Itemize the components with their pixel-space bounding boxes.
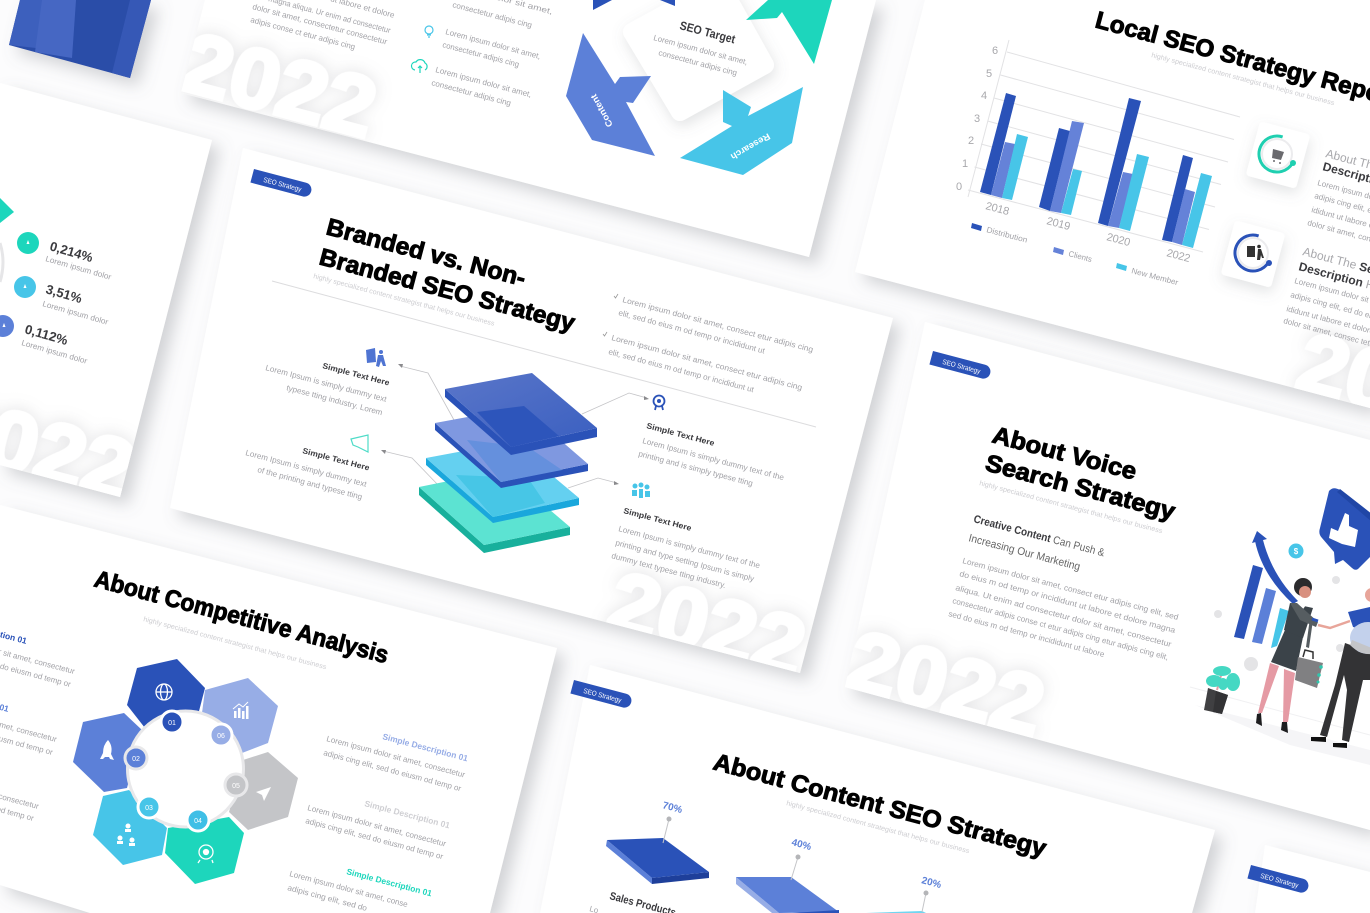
stat: 3,51%: Lorem ipsum dolor	[41, 299, 110, 327]
icon: building and person	[366, 348, 386, 367]
item: bottom left: of the printing and typese tting	[256, 465, 363, 502]
item: top right	[637, 396, 785, 488]
slide: bottom right	[1247, 845, 1370, 913]
icon: team	[632, 482, 650, 498]
stat: 3,51%: 3,51%	[44, 281, 84, 306]
subtitle: highly specialized content strategist that helps our business	[1150, 52, 1335, 107]
slide: about voice search strategy	[838, 322, 1370, 830]
background dots	[1214, 576, 1344, 671]
description 3: Lorem ipsum dolor sit amet, conse	[288, 869, 409, 909]
centre card SEO target: SEO Target	[678, 18, 737, 46]
badge: SEO Strategy	[1260, 873, 1299, 890]
watermark year: 2022	[838, 613, 1054, 754]
growth bars	[1234, 565, 1289, 648]
hexagon ring diagram: 06	[217, 733, 225, 740]
icon: bar chart	[233, 702, 248, 719]
icon list text: consectetur adipis cing	[451, 0, 533, 30]
item: bottom right: Simple Text Here	[622, 506, 693, 533]
item: top right: printing and is simply typese tting	[637, 449, 754, 488]
badge	[570, 680, 633, 709]
watermark year: 2022	[172, 15, 386, 155]
icon: target	[198, 845, 213, 863]
bar chart: 3	[974, 113, 980, 125]
description 2	[304, 798, 451, 861]
subtitle: highly specialized content strategist that helps our business	[978, 480, 1163, 535]
checklist text: Lorem ipsum dolor sit amet, consect etur adipis cing	[610, 333, 803, 392]
grey ring fragment	[0, 243, 3, 282]
item: bottom left	[244, 435, 371, 502]
stat: 0,214%: Lorem ipsum dolor	[44, 254, 113, 282]
checklist text: elit, sed do eius m od temp or incididunt ut	[607, 347, 756, 394]
badge: SEO Strategy	[942, 359, 981, 376]
icon: cloud upload	[411, 60, 427, 73]
growth arrow	[1252, 531, 1298, 604]
cycle arrow: research: Research	[729, 131, 772, 162]
icon: award ribbon	[654, 396, 664, 410]
bar chart: 6	[992, 45, 998, 57]
body text column: adipis conse ct etur adipis cing	[249, 15, 356, 52]
chart legend: Clients	[1067, 249, 1093, 264]
body text	[947, 556, 1179, 662]
bar chart: 2019	[1045, 215, 1072, 233]
description 2: Lorem ipsum dolor sit amet, consectetur	[306, 803, 447, 849]
lead text: Increasing Our Marketing	[967, 532, 1081, 573]
item: bottom left: Lorem Ipsum is simply dummy text	[244, 448, 368, 489]
icon list text: consectetur adipis cing	[441, 40, 520, 69]
stat: 0,112%: 0,112%	[23, 321, 70, 348]
icon list text	[430, 0, 554, 108]
card: shopping ring icon	[1246, 121, 1310, 189]
item: bottom right: Lorem Ipsum is simply dummy text of the	[617, 524, 761, 570]
isometric layer stack	[419, 373, 597, 553]
illustration: handshake with growth chart	[1190, 488, 1370, 765]
plate: 20%	[866, 875, 942, 913]
icon: megaphone	[351, 435, 368, 452]
badge	[929, 351, 992, 380]
slide: left percentages	[0, 83, 212, 518]
icon: people	[117, 824, 135, 846]
bar chart: 1	[962, 158, 968, 170]
icon list text: Lorem ipsum dolor sit amet,	[434, 65, 533, 99]
slide: top centre SEO target	[172, 0, 876, 257]
cycle arrow: content	[566, 33, 655, 156]
slide: bottom centre content SEO	[540, 665, 1215, 913]
coin	[1288, 544, 1304, 558]
description 1: adipis cing elit, sed do eiusm od temp or	[322, 748, 462, 793]
teal diamond	[0, 198, 14, 223]
centre card SEO target: Lorem ipsum dolor sit amet,	[652, 33, 749, 67]
hexagon ring diagram: 04	[194, 818, 202, 825]
checklist text: Lorem ipsum dolor sit amet, consect etur adipis cing	[621, 295, 814, 354]
lead text: Creative Content Can Push &	[972, 513, 1106, 560]
description 1: Lorem ipsum dolor sit amet, consectetur	[325, 734, 466, 780]
plate: 70%	[588, 800, 709, 913]
hexagon ring diagram: 05	[232, 783, 240, 790]
slide: branded vs non-branded main	[170, 148, 893, 695]
plate: 70%: 70%	[661, 800, 683, 816]
description 2: adipis cing elit, sed do eiusm od temp or	[304, 816, 444, 861]
icon: paper plane	[256, 787, 271, 801]
icon: light bulb	[425, 26, 433, 37]
icon list text: consectetur adipis cing	[430, 78, 512, 108]
chart legend	[971, 223, 1180, 287]
bar chart: 2022	[1165, 247, 1192, 265]
plate: 40%: 40%	[790, 837, 812, 853]
slide: top left image	[9, 0, 151, 78]
cycle arrow: content: Content	[589, 93, 615, 129]
stat: 0,214%	[17, 232, 113, 282]
centre card SEO target	[632, 0, 765, 112]
title: Search Strategy	[982, 450, 1179, 526]
item: top left	[264, 348, 391, 417]
stat: 3,51%	[14, 276, 110, 327]
item: top left: Simple Text Here	[321, 361, 391, 388]
item: bottom right	[610, 482, 761, 590]
like bubble	[1319, 488, 1370, 570]
description 2: Simple Description 01	[363, 798, 451, 830]
cycle arrow: research	[680, 87, 803, 175]
description 1	[322, 731, 469, 793]
plate: 40%	[736, 837, 839, 913]
card: people ring icon	[1221, 220, 1285, 288]
badge: SEO Strategy	[583, 688, 622, 705]
item: bottom right: printing and type setting Ipsum is simply	[614, 538, 755, 583]
plant	[1204, 666, 1240, 714]
description block 2	[1282, 244, 1370, 350]
body text: aliqua. Ut enim ad consectetur dolor sit amet, consectetur	[954, 583, 1173, 649]
chart legend: New Member	[1130, 266, 1180, 287]
stat: 0,112%: Lorem ipsum dolor	[20, 338, 89, 366]
item: top left: typese tting industry. Lorem	[285, 383, 384, 417]
chart legend: Distribution	[985, 225, 1028, 245]
hexagon ring diagram: 01	[168, 720, 176, 727]
bar chart: 2018	[984, 200, 1011, 218]
bar chart: 2020	[1105, 231, 1132, 249]
hexagon ring diagram: 02	[132, 756, 140, 763]
coin: $	[1294, 547, 1299, 556]
item: bottom right: dummy text typese tting industry.	[610, 551, 727, 590]
floor	[1190, 687, 1370, 765]
item: top right: Lorem Ipsum is simply dummy text of the	[641, 436, 785, 482]
title: Branded vs. Non-	[323, 214, 529, 292]
title: About Competitive Analysis	[91, 566, 391, 669]
body text: Lorem ipsum dolor sit amet, consect etur adipis cing elit, sed	[961, 556, 1179, 622]
subtitle: highly specialized content strategist that helps our business	[785, 800, 970, 855]
checklist text: elit, sed do eius m od temp or incididunt ut	[617, 308, 767, 356]
body text: sed do eius m od temp or incididunt ut labore	[947, 609, 1106, 659]
icon list text: Lorem ipsum dolor sit amet,	[444, 27, 542, 61]
leader arrows	[381, 364, 649, 488]
icon: globe	[156, 684, 172, 700]
body text: consectetur adipis conse ct etur adipis cing etur adipis cing elit,	[951, 596, 1169, 662]
badge	[250, 169, 313, 198]
body text: do eius m od temp or incididunt ut labore et dolore magna	[958, 569, 1177, 635]
description 3: Simple Description 01	[345, 866, 433, 898]
man	[1311, 588, 1370, 748]
left text fragments	[0, 614, 76, 823]
stat: 0,214%: 0,214%	[48, 238, 95, 265]
bar chart: 2	[968, 135, 974, 147]
woman	[1256, 578, 1323, 733]
title: About Content SEO Strategy	[710, 749, 1050, 863]
slide: local SEO strategy report	[859, 10, 1370, 420]
title: Branded SEO Strategy	[316, 244, 578, 337]
description 1: Simple Description 01	[381, 731, 469, 763]
bar chart	[956, 40, 1240, 265]
item: bottom left: Simple Text Here	[301, 446, 371, 473]
title	[982, 422, 1179, 526]
slide: competitive analysis	[0, 505, 557, 913]
cycle arrow: dark top	[593, 0, 612, 10]
body text column: dolor sit amet, consectetur consectetur	[251, 2, 388, 47]
bar chart: 4	[981, 90, 987, 102]
cycle arrow: dark top right	[660, 0, 675, 6]
bar chart: 5	[986, 68, 992, 80]
watermark year: 2022	[599, 554, 815, 695]
plate: 20%: 20%	[920, 875, 942, 891]
stat: 0,112%	[0, 315, 89, 366]
cycle arrow: teal	[746, 0, 832, 64]
item: top right: Simple Text Here	[645, 421, 716, 448]
hexagon ring diagram: 03	[145, 805, 153, 812]
bar chart: 0	[956, 181, 962, 193]
description block 1	[1306, 146, 1370, 252]
title: About Voice	[989, 422, 1139, 486]
subtitle: highly specialized content strategist that helps our business	[142, 616, 327, 671]
badge: SEO Strategy	[263, 177, 302, 194]
description 3: adipis cing elit, sed do	[286, 883, 369, 913]
icon: rocket	[100, 740, 114, 760]
subtitle: highly specialized content strategist that helps our business	[312, 273, 496, 328]
item: top left: Lorem Ipsum is simply dummy text	[264, 363, 388, 404]
centre card SEO target: consectetur adipis cing	[657, 48, 738, 78]
hexagon ring diagram	[73, 659, 298, 884]
checklist text	[603, 294, 814, 394]
